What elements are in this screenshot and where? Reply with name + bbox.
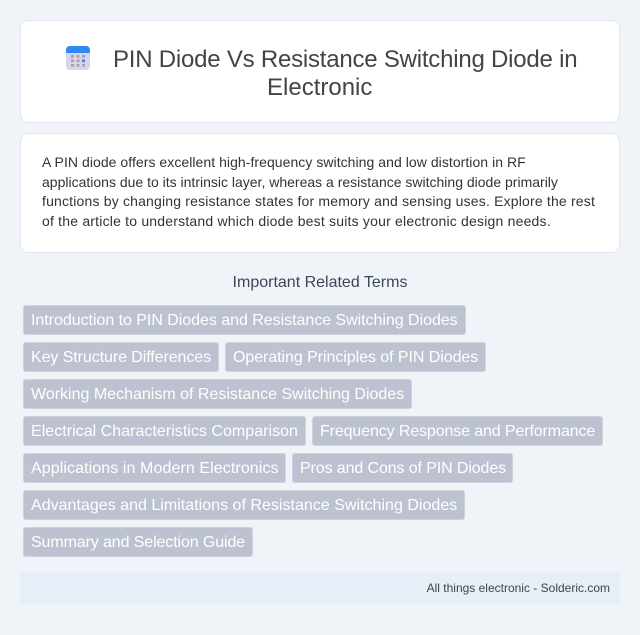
- panel: title card: [20, 20, 620, 123]
- tag: key structure: Key Structure Differences: [31, 349, 211, 366]
- tag: summary: [23, 527, 253, 557]
- tag: working mechanism: Working Mechanism of Resistance Switching Diodes: [31, 386, 404, 403]
- heading: title line 1: PIN Diode Vs Resistance Switching Diode in: [113, 46, 577, 73]
- tag: electrical characteristics: [23, 416, 306, 446]
- heading: title line 2: Electronic: [267, 74, 372, 101]
- icon: calendar: [66, 46, 90, 70]
- tag: introduction: [23, 305, 466, 335]
- panel: summary card: [20, 133, 620, 253]
- tag: summary: Summary and Selection Guide: [31, 534, 245, 551]
- footer bar: [20, 571, 620, 605]
- text block: summary: A PIN diode offers excellent high-frequency switching and low distortion in RF: [42, 154, 526, 170]
- tag: applications: Applications in Modern Electronics: [31, 460, 279, 477]
- tag: advantages: Advantages and Limitations of Resistance Switching Diodes: [31, 497, 457, 514]
- tag: operating principles: Operating Principles of PIN Diodes: [233, 349, 478, 366]
- heading: important related terms: Important Related Terms: [233, 274, 407, 291]
- tag: advantages: [23, 490, 465, 520]
- tag: frequency response: Frequency Response and Performance: [320, 423, 595, 440]
- text block: summary: applications due to its intrinsic layer, whereas a resistance switching diode primarily: [42, 174, 558, 190]
- tag: pros and cons: [292, 453, 513, 483]
- text block: summary: of the article to understand which diode best suits your electronic design needs.: [42, 212, 551, 228]
- tag: frequency response: [312, 416, 603, 446]
- tag: working mechanism: [23, 379, 412, 409]
- tag: introduction: Introduction to PIN Diodes and Resistance Switching Diodes: [31, 312, 458, 329]
- tag: pros and cons: Pros and Cons of PIN Diodes: [300, 460, 506, 477]
- text block: summary: functions by changing resistance states for memory and sensing uses. Explore the rest: [42, 193, 595, 209]
- text block: summary: [42, 154, 595, 229]
- tag: applications: [23, 453, 286, 483]
- tag: electrical characteristics: Electrical Characteristics Comparison: [31, 423, 298, 440]
- tag: key structure: [23, 342, 219, 372]
- tag: operating principles: [225, 342, 486, 372]
- footer text: All things electronic - Solderic.com: [427, 581, 610, 595]
